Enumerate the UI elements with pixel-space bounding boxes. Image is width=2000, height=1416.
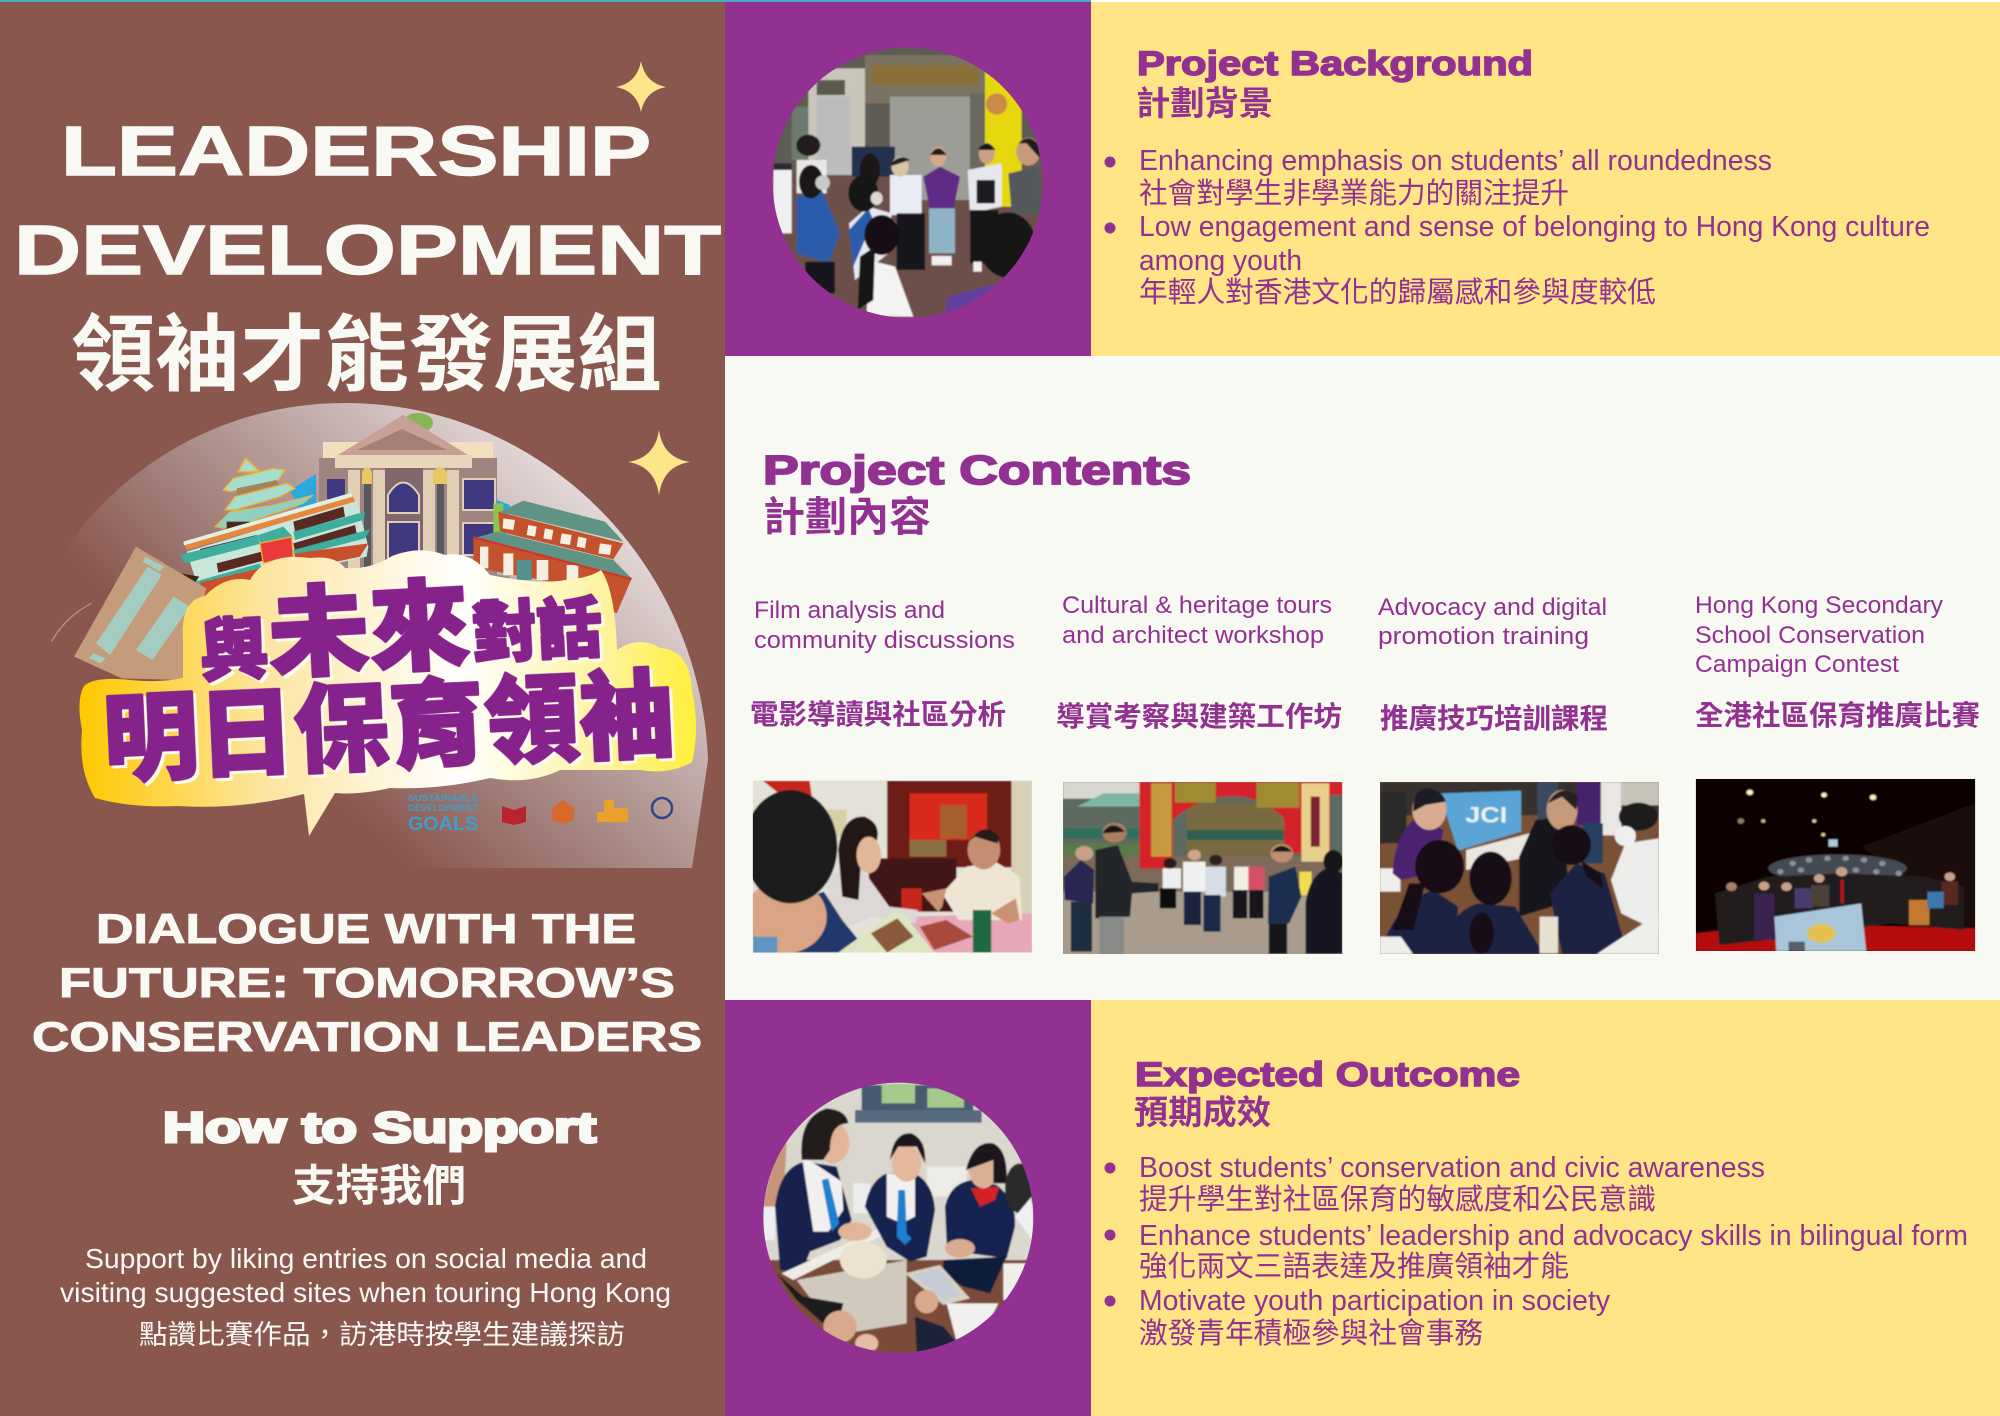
panel: expected outcome purple band xyxy=(725,1000,1091,1416)
column 3: advocacy training: Advocacy and digital xyxy=(1378,594,1607,621)
column 3: advocacy training: promotion training xyxy=(1378,623,1589,650)
photo: cinema group shot xyxy=(1693,777,1978,953)
sign title text xyxy=(101,570,677,795)
three seated students xyxy=(797,1260,907,1332)
text: support instructions: visiting suggested sites when touring Hong Kong xyxy=(60,1277,671,1308)
heading: Expected Outcome: Expected Outcome xyxy=(1135,1056,1520,1094)
photo: street tour circle xyxy=(768,43,1048,323)
column 2: heritage tours: 導賞考察與建築工作坊 xyxy=(1056,701,1342,732)
figures xyxy=(828,871,919,925)
panel: expected outcome text xyxy=(1091,1000,2000,1416)
list: outcome bullets: 提升學生對社區保育的敏感度和公民意識 xyxy=(1139,1183,1656,1216)
photo: advocacy training with JCI table xyxy=(1376,780,1662,957)
illustration: heritage buildings dome and logo xyxy=(30,403,708,868)
list: background bullets: among youth xyxy=(1139,245,1302,277)
column 4: contest: Campaign Contest xyxy=(1695,651,1899,678)
column 3: advocacy training xyxy=(1378,594,1608,734)
heading: How to Support: 支持我們 xyxy=(292,1163,466,1211)
column 4: contest: 全港社區保育推廣比賽 xyxy=(1695,700,1980,731)
dome backdrop xyxy=(30,403,708,868)
list: outcome bullets: Boost students’ conservation and civic awareness xyxy=(1139,1152,1765,1184)
classical building xyxy=(290,413,510,578)
text: support instructions xyxy=(60,1243,671,1350)
text: support instructions: 點讚比賽作品，訪港時按學生建議探訪 xyxy=(139,1320,625,1350)
column 4: contest xyxy=(1695,592,1980,731)
list: outcome bullets: Enhance students’ leadership and advocacy skills in bilingual form xyxy=(1139,1220,1968,1252)
column 3: advocacy training: 推廣技巧培訓課程 xyxy=(1380,703,1608,734)
list: background bullets: Low engagement and sense of belonging to Hong Kong culture xyxy=(1139,211,1930,243)
sign title text: 明日保育領袖 xyxy=(101,662,677,795)
speech bubble sign xyxy=(79,550,696,836)
SDG logos row xyxy=(408,793,672,835)
title: Leadership Development: 領袖才能發展組 xyxy=(71,308,662,402)
list: outcome bullets: Motivate youth participation in society xyxy=(1139,1285,1610,1317)
photo: advocacy training with JCI table: JCI xyxy=(1465,804,1507,828)
column 1: film analysis xyxy=(750,597,1015,730)
icon: small sparkle xyxy=(616,61,666,112)
list: outcome bullets: 強化兩文三語表達及推廣領袖才能 xyxy=(1139,1250,1569,1283)
column 2: heritage tours: and architect workshop xyxy=(1062,622,1324,649)
list: outcome bullets: 激發青年積極參與社會事務 xyxy=(1139,1317,1483,1350)
heading: Project Contents xyxy=(763,447,1191,540)
heading: How to Support xyxy=(163,1104,596,1211)
student and teacher figures xyxy=(852,147,895,177)
photo: student discussion circle xyxy=(760,1080,1037,1357)
heading: How to Support: How to Support xyxy=(163,1104,596,1152)
SDG logos row: GOALS xyxy=(408,814,478,835)
panel: project background purple band xyxy=(725,2,1091,356)
column 1: film analysis: Film analysis and xyxy=(754,597,945,624)
SDG logos row: SUSTAINABLE xyxy=(408,793,478,804)
photo: heritage tour at bamboo theatre xyxy=(1061,780,1346,957)
column 4: contest: Hong Kong Secondary xyxy=(1695,592,1943,619)
heading: Project Contents: Project Contents xyxy=(763,447,1191,493)
heading: Project Background: 計劃背景 xyxy=(1136,86,1273,123)
column 4: contest: School Conservation xyxy=(1695,622,1925,649)
heading: Expected Outcome: 預期成效 xyxy=(1134,1095,1271,1132)
heading: Project Background xyxy=(1136,45,1533,123)
crowd xyxy=(1163,868,1181,888)
subtitle: Dialogue with the Future: FUTURE: TOMORROW’S xyxy=(59,959,675,1006)
panel: project background text xyxy=(1091,0,2000,356)
list: background bullets: 社會對學生非學業能力的關注提升 xyxy=(1139,177,1569,210)
SDG logos row: DEVELOPMENT xyxy=(408,803,478,814)
sign title text: 與 xyxy=(198,611,270,691)
column 1: film analysis: community discussions xyxy=(754,627,1015,654)
heading: Project Background: Project Background xyxy=(1137,45,1533,83)
subtitle: Dialogue with the Future: DIALOGUE WITH THE xyxy=(96,905,636,952)
panel: project contents xyxy=(752,454,1980,954)
heading: Project Contents: 計劃內容 xyxy=(763,494,931,540)
title: Leadership Development: DEVELOPMENT xyxy=(14,211,721,289)
subtitle: Dialogue with the Future: CONSERVATION LEADERS xyxy=(32,1013,702,1060)
column 2: heritage tours: Cultural & heritage tours xyxy=(1062,592,1332,619)
column 1: film analysis: 電影導讀與社區分析 xyxy=(750,699,1006,730)
photo: film discussion at altar xyxy=(743,778,1036,955)
text: support instructions: Support by liking entries on social media and xyxy=(85,1243,647,1274)
column 2: heritage tours xyxy=(1056,592,1342,732)
tilted tram building xyxy=(52,547,206,680)
panel: left title column xyxy=(0,0,1091,1416)
title: Leadership Development: LEADERSHIP xyxy=(61,112,651,190)
red temple xyxy=(467,501,632,613)
list: background bullets xyxy=(1104,145,1930,309)
list: outcome bullets xyxy=(1104,1152,1968,1350)
pagoda floating restaurant xyxy=(180,458,370,595)
sign title text: 對話 xyxy=(470,591,604,671)
title: Leadership Development xyxy=(14,112,721,402)
subtitle: Dialogue with the Future xyxy=(32,905,702,1060)
list: background bullets: 年輕人對香港文化的歸屬感和參與度較低 xyxy=(1139,276,1656,309)
heading: Expected Outcome xyxy=(1134,1056,1520,1132)
list: background bullets: Enhancing emphasis on students’ all roundedness xyxy=(1139,145,1772,177)
icon: large sparkle xyxy=(628,430,690,495)
sign title text: 未來 xyxy=(265,570,473,690)
